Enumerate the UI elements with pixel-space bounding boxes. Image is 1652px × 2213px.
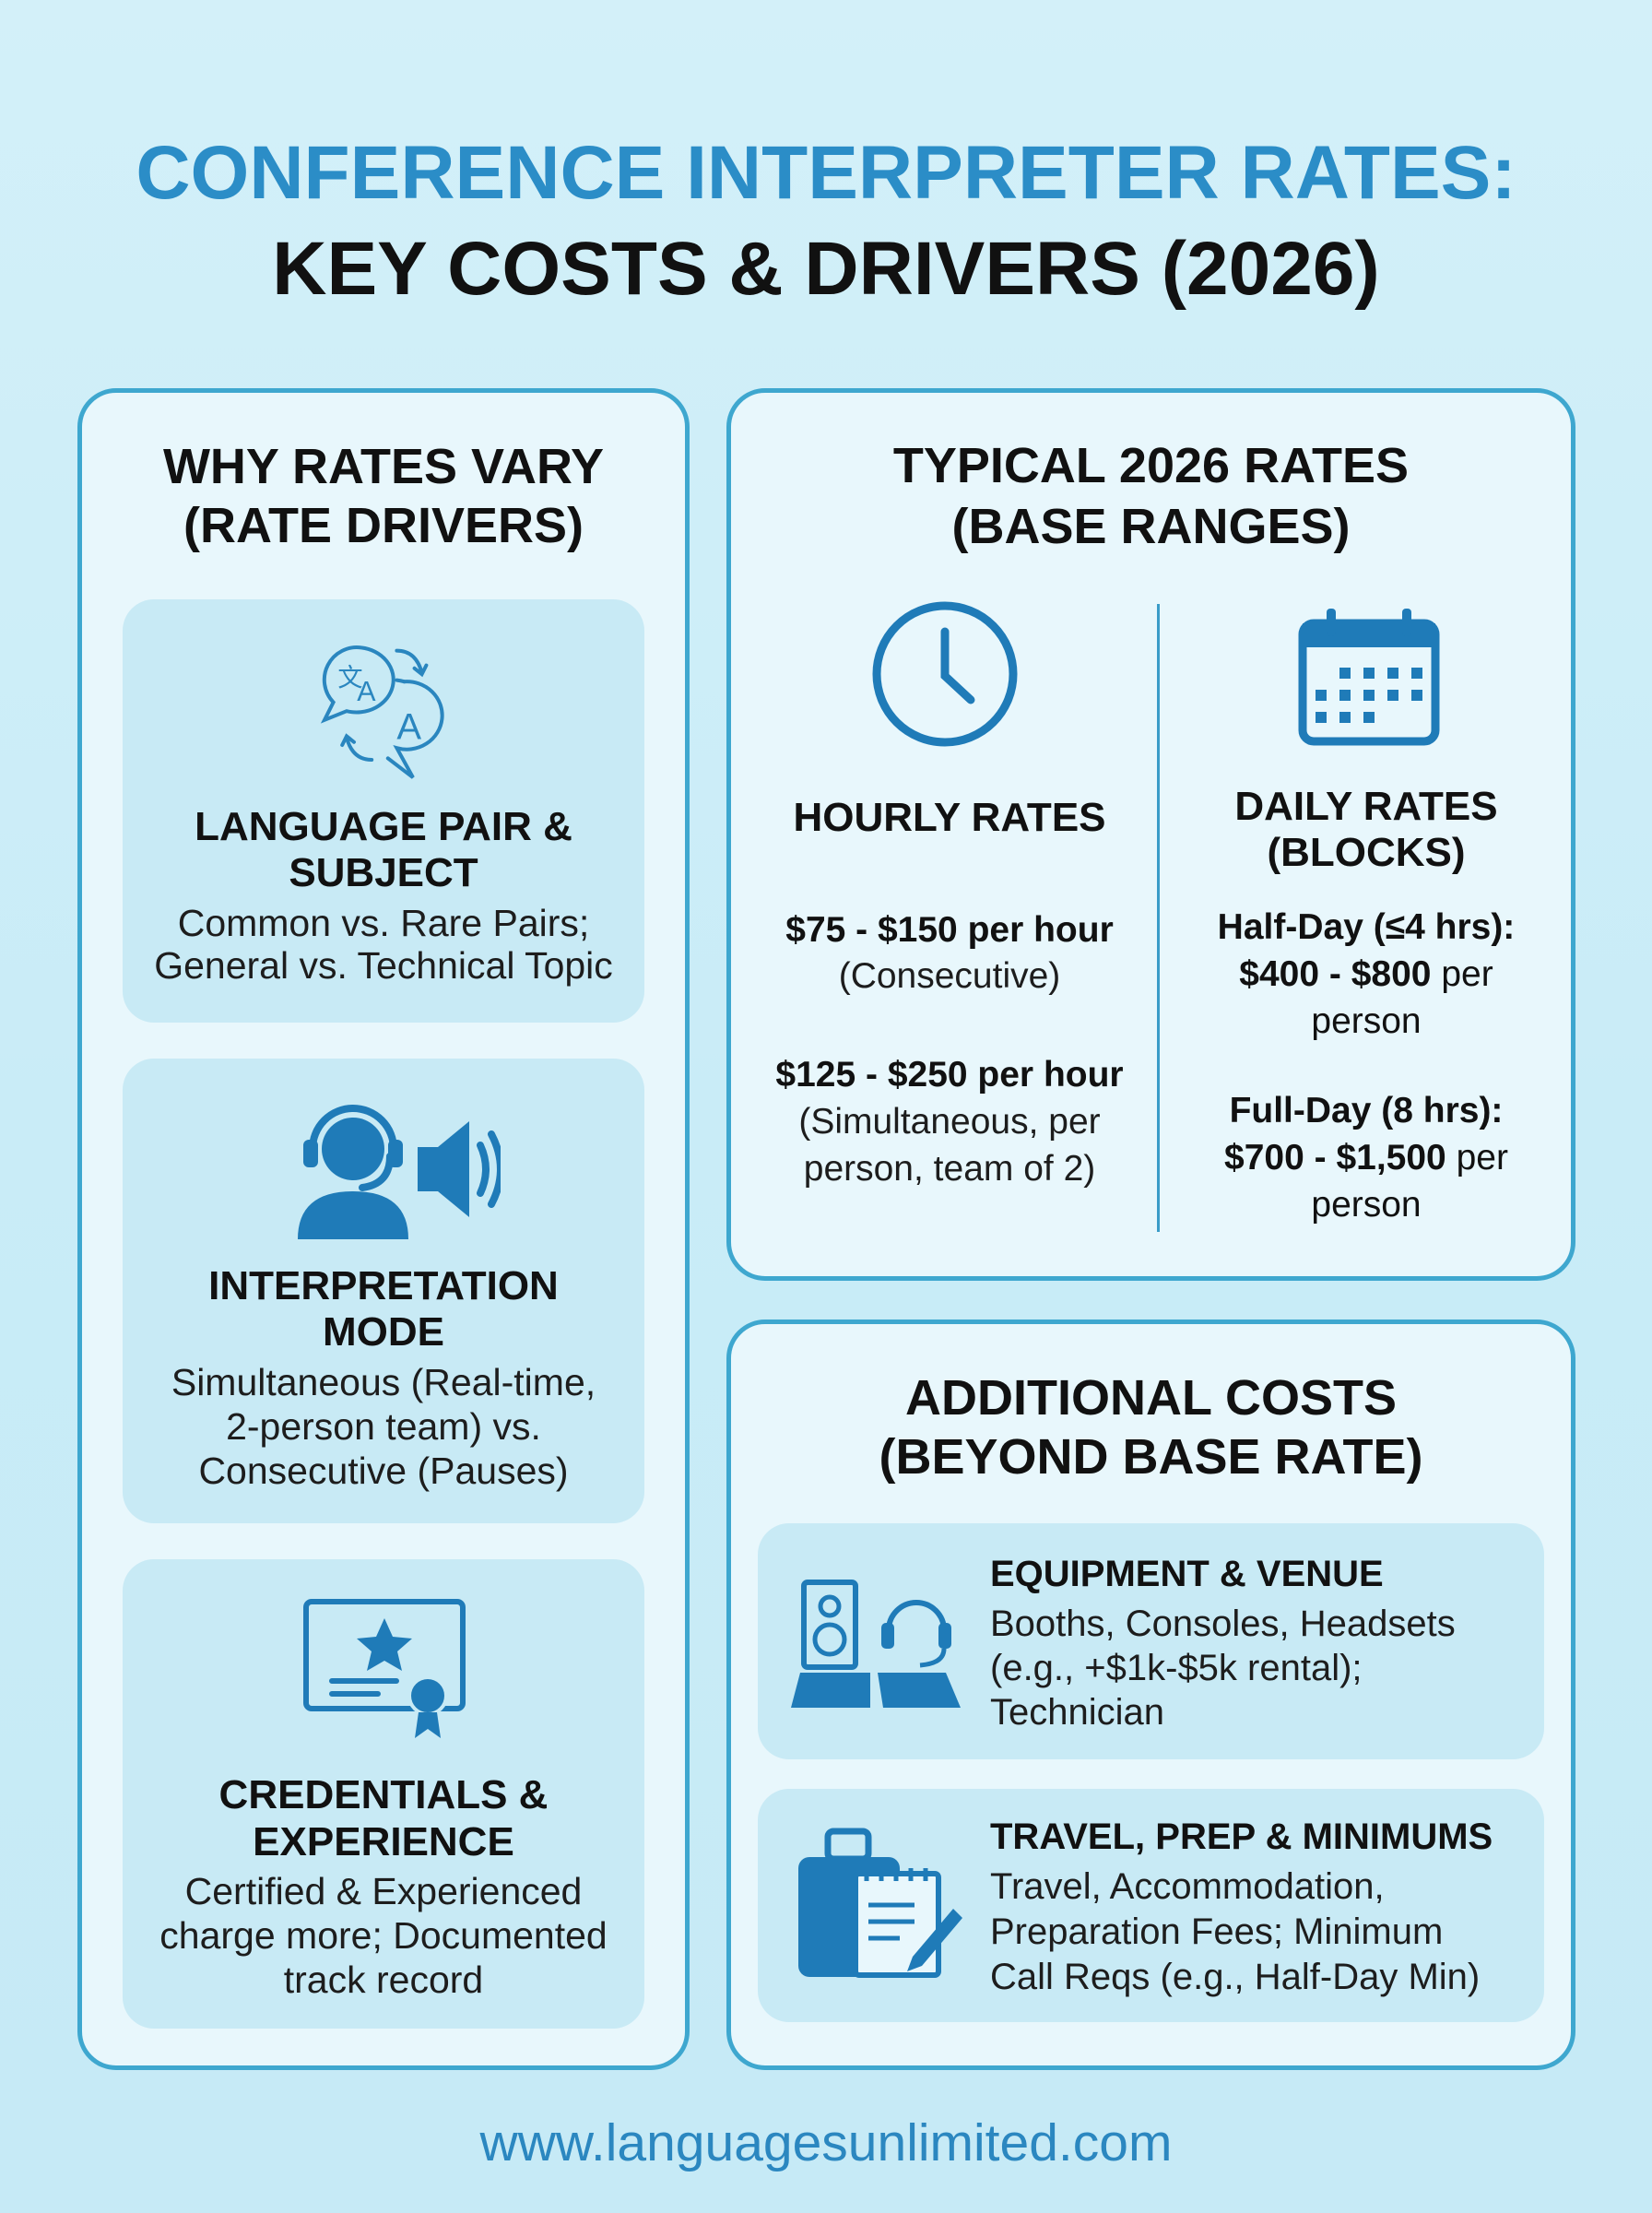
heading: typical rates: (BASE RANGES) [951, 499, 1351, 554]
text: equipment & venue: Booths, Consoles, Headsets [990, 1604, 1456, 1644]
column: daily rates: person [1311, 1185, 1422, 1225]
text: credentials: EXPERIENCE [253, 1819, 514, 1864]
card: interpretation mode [123, 1059, 644, 1523]
icon: clock [872, 601, 1018, 747]
heading: why rates vary: WHY RATES VARY [163, 439, 604, 494]
icon: translate bubbles [321, 645, 444, 779]
title [136, 131, 1516, 311]
text: language pair: Common vs. Rare Pairs; [178, 902, 589, 944]
heading: typical rates [893, 438, 1409, 554]
text: travel, prep & minimums: Travel, Accommodation, [990, 1866, 1385, 1907]
column: daily rates: DAILY RATES [1234, 784, 1498, 829]
text: travel, prep & minimums: TRAVEL, PREP & MINIMUMS [990, 1817, 1493, 1857]
heading: why rates vary [163, 439, 604, 553]
icon: speaker and headset [791, 1580, 961, 1708]
heading: additional costs [879, 1370, 1423, 1485]
text: language pair: SUBJECT [289, 850, 478, 895]
text: credentials [159, 1772, 608, 2001]
column: daily rates: Half-Day (≤4 hrs): [1218, 907, 1515, 947]
panel: why rates vary [77, 388, 690, 2070]
panel: additional costs [726, 1320, 1575, 2070]
column: hourly rates: HOURLY RATES [793, 795, 1106, 840]
column: daily rates: $400 - $800 per [1239, 954, 1493, 994]
title: CONFERENCE INTERPRETER RATES: [136, 131, 1516, 215]
text: travel, prep & minimums: Call Reqs (e.g., Half-Day Min) [990, 1957, 1480, 1997]
text: language pair: General vs. Technical Topic [154, 944, 613, 987]
column: hourly rates [775, 795, 1124, 1189]
heading: why rates vary: (RATE DRIVERS) [183, 498, 584, 553]
icon: translate bubbles: 文 [337, 657, 363, 693]
icon: certificate [303, 1599, 466, 1738]
column: hourly rates: $125 - $250 per hour [775, 1055, 1124, 1095]
heading: additional costs: ADDITIONAL COSTS [905, 1370, 1397, 1426]
text: travel, prep & minimums [990, 1817, 1493, 1997]
text: equipment & venue [990, 1554, 1456, 1733]
text: interpretation mode: 2-person team) vs. [226, 1405, 541, 1448]
divider [1157, 604, 1160, 1232]
text: interpretation mode [171, 1263, 596, 1492]
text: equipment & venue: EQUIPMENT & VENUE [990, 1554, 1384, 1594]
text: credentials: Certified & Experienced [185, 1870, 582, 1912]
icon: suitcase and notepad [798, 1828, 962, 1978]
footer url: www.languagesunlimited.com [480, 2113, 1172, 2172]
icon: translate bubbles: A [357, 676, 376, 707]
text: interpretation mode: INTERPRETATION [208, 1263, 559, 1308]
text: language pair: LANGUAGE PAIR & [195, 804, 572, 849]
card: travel, prep & minimums [758, 1789, 1544, 2022]
title: KEY COSTS & DRIVERS (2026) [272, 227, 1380, 311]
text: credentials: CREDENTIALS & [219, 1772, 548, 1817]
text: equipment & venue: Technician [990, 1692, 1164, 1733]
text: credentials: charge more; Documented [159, 1914, 608, 1957]
column: hourly rates: $75 - $150 per hour [785, 910, 1114, 950]
heading: typical rates: TYPICAL 2026 RATES [893, 438, 1409, 493]
text: interpretation mode: Consecutive (Pauses) [198, 1450, 569, 1492]
card: equipment & venue [758, 1523, 1544, 1759]
column: daily rates [1218, 784, 1515, 1225]
card: credentials [123, 1559, 644, 2029]
panel: typical 2026 rates [726, 388, 1575, 1281]
column: daily rates: $700 - $1,500 per [1224, 1138, 1508, 1178]
icon: headset person and speaker [298, 1105, 501, 1239]
text: travel, prep & minimums: Preparation Fees; Minimum [990, 1911, 1443, 1952]
icon: calendar [1298, 609, 1440, 745]
column: daily rates: Full-Day (8 hrs): [1230, 1091, 1503, 1130]
text: equipment & venue: (e.g., +$1k-$5k rental); [990, 1648, 1363, 1688]
text: credentials: track record [284, 1959, 483, 2001]
text: interpretation mode: Simultaneous (Real-time, [171, 1361, 596, 1403]
text: interpretation mode: MODE [323, 1309, 444, 1355]
column: daily rates: person [1311, 1001, 1422, 1041]
card: language pair [123, 599, 644, 1023]
column: hourly rates: (Simultaneous, per [798, 1102, 1101, 1142]
heading: additional costs: (BEYOND BASE RATE) [879, 1429, 1423, 1485]
text: language pair [154, 804, 613, 987]
column: hourly rates: person, team of 2) [804, 1149, 1095, 1189]
column: daily rates: (BLOCKS) [1267, 830, 1466, 875]
column: hourly rates: (Consecutive) [839, 956, 1060, 996]
icon: translate bubbles: A [396, 707, 421, 748]
